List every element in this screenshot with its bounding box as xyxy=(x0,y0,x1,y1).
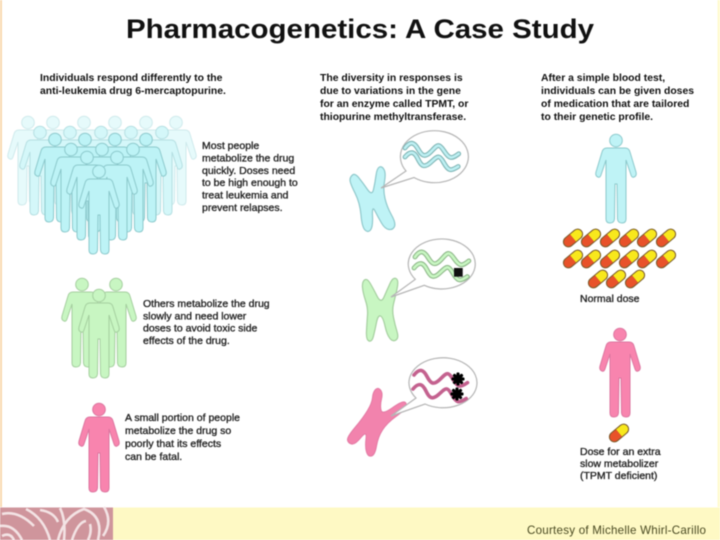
icon: blue chromosome xyxy=(350,167,395,232)
panel: gene variation xyxy=(320,73,477,456)
text: others: doses to avoid toxic side xyxy=(143,323,258,335)
footer bar xyxy=(0,507,720,540)
text: small portion: metabolize the drug so xyxy=(125,425,231,437)
label: extra slow dose: Dose for an extra xyxy=(580,446,661,458)
callout: normal gene xyxy=(381,131,468,188)
heading: after a simple blood test: to their genetic profile. xyxy=(541,112,653,123)
icon: green chromosome xyxy=(362,278,398,341)
panel: differing responses xyxy=(8,73,298,492)
heading: diversity in responses: The diversity in responses is xyxy=(320,73,463,84)
heading: individuals respond differently: Individuals respond differently to the xyxy=(40,73,222,84)
title: Pharmacogenetics: A Case Study xyxy=(126,14,594,44)
text: others: Others metabolize the drug xyxy=(143,298,270,310)
text: others: slowly and need lower xyxy=(143,310,247,322)
decorative tissue image xyxy=(0,507,113,540)
icon: normal dose pills xyxy=(561,226,678,291)
icon: three slow metabolizers xyxy=(62,278,136,378)
heading: diversity in responses: due to variations in the gene xyxy=(320,86,461,97)
text: most people: treat leukemia and xyxy=(202,190,289,202)
heading: after a simple blood test: individuals can be given doses xyxy=(541,86,694,97)
text: others: effects of the drug. xyxy=(143,335,230,347)
callout: deficient gene xyxy=(391,358,477,416)
text: most people: Most people xyxy=(202,140,259,152)
callout: variant gene xyxy=(391,239,475,297)
label: extra slow dose: slow metabolizer xyxy=(580,458,659,470)
text: small portion: can be fatal. xyxy=(125,451,182,463)
icon: single pill xyxy=(607,421,631,445)
icon: crowd of fast metabolizers xyxy=(8,116,196,254)
text: most people: prevent relapses. xyxy=(202,202,283,214)
heading: individuals respond differently: anti-leukemia drug 6-mercaptopurine. xyxy=(40,86,226,97)
text: most people: metabolize the drug xyxy=(202,152,294,164)
text: small portion: A small portion of people xyxy=(125,412,240,424)
icon: pink person xyxy=(600,328,640,417)
heading: diversity in responses: thiopurine methyltransferase. xyxy=(320,112,466,123)
label: normal dose: Normal dose xyxy=(580,293,640,305)
heading: after a simple blood test: of medication that are tailored xyxy=(541,99,689,110)
text: most people: to be high enough to xyxy=(202,177,298,189)
icon: blue person xyxy=(596,134,636,223)
label: extra slow dose: (TPMT deficient) xyxy=(580,470,657,482)
heading: diversity in responses: for an enzyme called TPMT, or xyxy=(320,99,468,110)
credit: Courtesy of Michelle Whirl-Carillo xyxy=(527,524,706,537)
panel: tailored dosing xyxy=(541,73,694,482)
icon: one poor metabolizer xyxy=(79,403,119,492)
text: small portion: poorly that its effects xyxy=(125,438,221,450)
heading: after a simple blood test: After a simple blood test, xyxy=(541,73,665,84)
icon: pink chromosome xyxy=(347,388,406,456)
text: most people: quickly. Doses need xyxy=(202,165,295,177)
